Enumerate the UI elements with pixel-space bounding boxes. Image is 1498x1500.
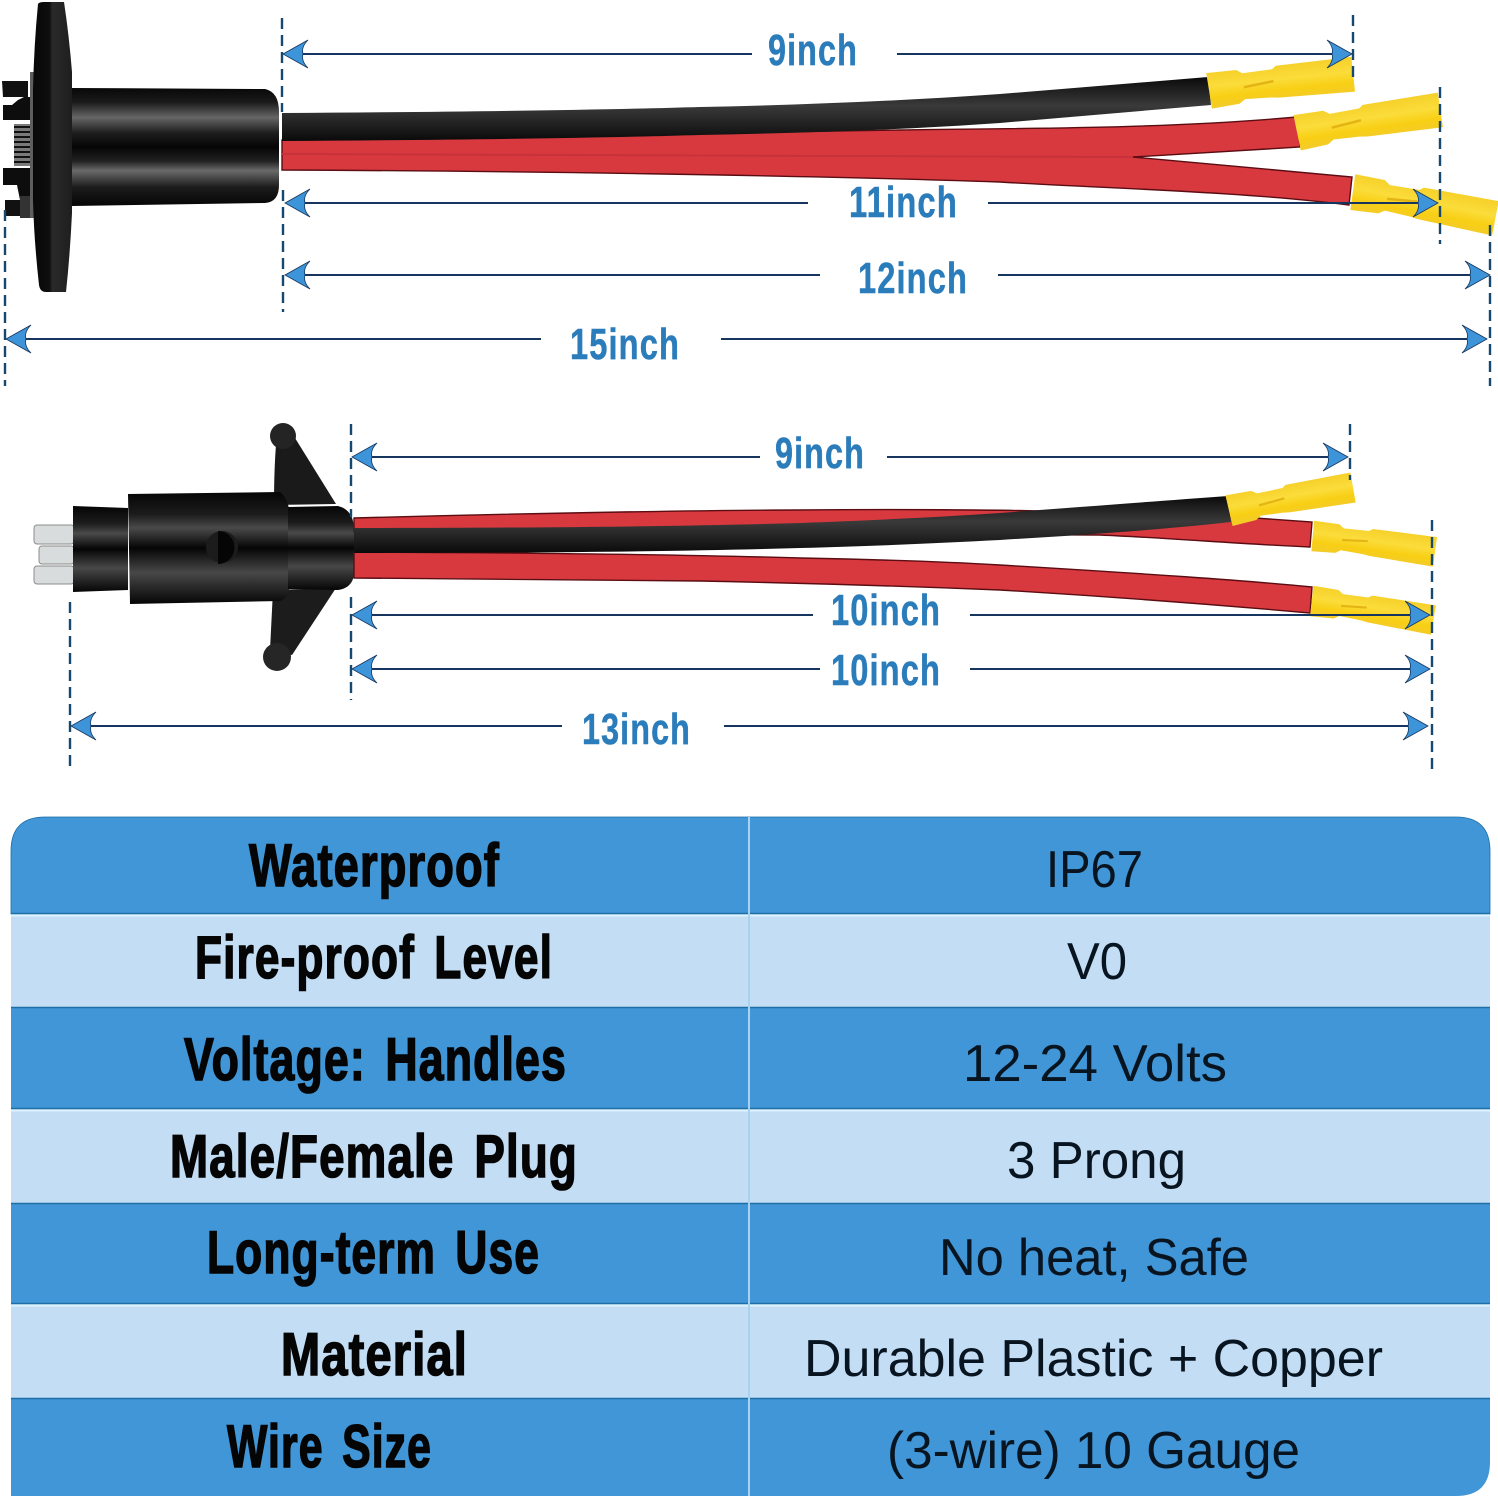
row: long-term use xyxy=(207,1219,1249,1287)
icon: socket body xyxy=(72,88,279,206)
dimension: 10inch first xyxy=(352,586,1430,635)
dimension: 15inch xyxy=(6,320,1487,369)
row: material xyxy=(281,1321,1383,1388)
row: fire-proof level xyxy=(195,924,1127,991)
yellow terminals, bottom xyxy=(1225,473,1437,636)
dimension: 9inch top xyxy=(283,26,1352,75)
dimension: 15inch: 15inch xyxy=(570,320,680,369)
row: wire size: (3-wire) 10 Gauge xyxy=(887,1422,1300,1480)
dimension: 12inch xyxy=(285,254,1490,303)
terminal 1 xyxy=(1206,57,1355,109)
row: waterproof: Waterproof xyxy=(249,832,500,899)
dimension: 13inch: 13inch xyxy=(582,705,691,754)
dimension: 10inch second xyxy=(352,646,1430,695)
icon: plug main barrel xyxy=(128,492,290,604)
dimension: 9inch lower: 9inch xyxy=(775,429,865,478)
row: long-term use: No heat, Safe xyxy=(939,1229,1249,1287)
dimension: 11inch: 11inch xyxy=(849,178,958,227)
top cable assembly: female socket xyxy=(2,2,279,292)
dimension: 9inch top: 9inch xyxy=(768,26,858,75)
dimension: 9inch lower xyxy=(352,429,1348,478)
red wire pair xyxy=(282,117,1352,205)
black wire xyxy=(282,77,1211,141)
row: fire-proof level: Fire-proof Level xyxy=(195,924,553,991)
icon: mounting flange xyxy=(33,2,72,292)
row: wire size xyxy=(227,1413,1300,1480)
row: fire-proof level: V0 xyxy=(1067,933,1127,991)
row: voltage: 12-24 Volts xyxy=(963,1035,1227,1093)
terminal 3 xyxy=(1348,173,1498,238)
icon: plug front step xyxy=(73,506,128,592)
icon: plug rear barrel xyxy=(288,506,354,590)
icon: silver prongs xyxy=(34,525,74,584)
icon: bottom wing xyxy=(263,588,336,671)
dashed guide lines, top xyxy=(5,15,1490,386)
icon: rear terminals and spring xyxy=(2,72,37,218)
row: material: Durable Plastic + Copper xyxy=(804,1330,1383,1388)
row: waterproof xyxy=(249,832,1143,899)
terminal 1 xyxy=(1225,473,1356,526)
terminal 2 xyxy=(1310,520,1437,568)
dimension: 11inch xyxy=(285,178,1438,227)
yellow terminals, top xyxy=(1206,57,1498,238)
lower red wire xyxy=(354,552,1312,613)
icon: top wing xyxy=(270,423,336,505)
row: plug: Male/Female Plug xyxy=(170,1123,578,1190)
row: long-term use: Long-term Use xyxy=(207,1219,540,1286)
top wires xyxy=(282,77,1352,205)
icon: locking slot xyxy=(206,531,238,564)
specification table xyxy=(11,817,1490,1496)
dimension: 10inch second: 10inch xyxy=(831,646,941,695)
row: voltage xyxy=(184,1026,1227,1093)
bottom wires xyxy=(354,496,1312,613)
dimension: 10inch first: 10inch xyxy=(831,586,941,635)
row: plug: 3 Prong xyxy=(1007,1132,1186,1190)
row: material: Material xyxy=(281,1321,468,1388)
bottom cable assembly: male plug xyxy=(34,423,354,671)
table row backgrounds xyxy=(11,817,1490,1496)
top red wire xyxy=(354,510,1312,547)
dashed guide lines, bottom xyxy=(70,424,1432,770)
terminal 2 xyxy=(1293,93,1443,151)
row: voltage: Voltage: Handles xyxy=(184,1026,567,1093)
row: wire size: Wire Size xyxy=(227,1413,432,1480)
dimension: 12inch: 12inch xyxy=(858,254,968,303)
row: waterproof: IP67 xyxy=(1046,841,1143,899)
row: plug xyxy=(170,1123,1186,1190)
terminal 3 xyxy=(1308,585,1436,636)
dimension: 13inch xyxy=(71,705,1428,754)
black wire xyxy=(354,496,1231,553)
